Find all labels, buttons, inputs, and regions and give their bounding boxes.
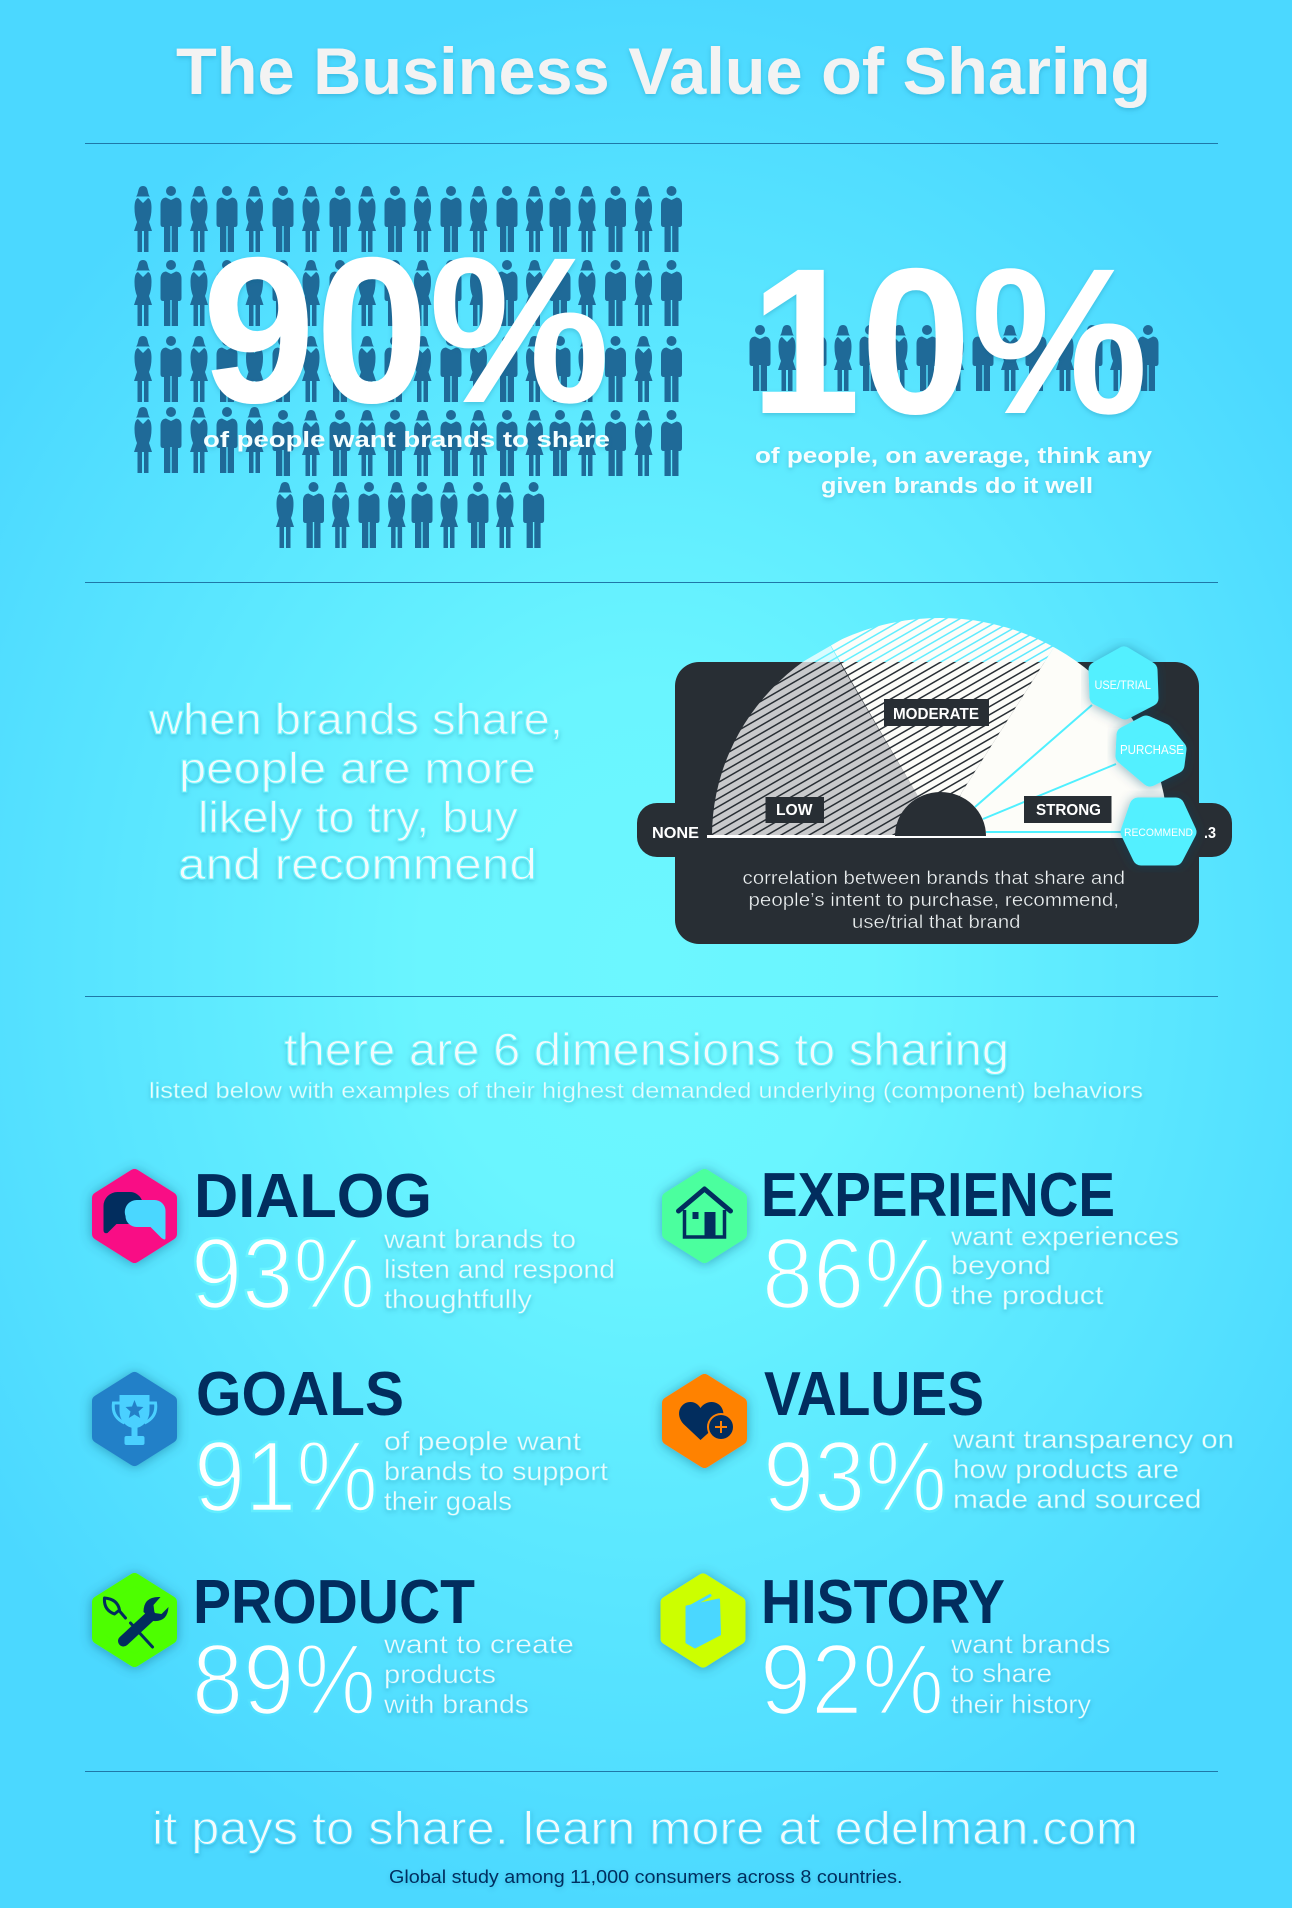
description: their history [951,1689,1091,1719]
heading: HISTORY [761,1568,1005,1637]
hexagon: use/trial: USE/TRIAL [1094,678,1151,692]
label: moderate: MODERATE [893,706,979,723]
caption: 10%: given brands do it well [821,473,1093,498]
sector: moderate [831,618,1054,798]
label: low [766,797,824,823]
heading: DIALOG [194,1162,432,1231]
section subheading: listed below with examples of their highest demanded underlying (component) behaviors [149,1078,1143,1103]
label: moderate [884,699,989,726]
description: want brands to [383,1224,576,1254]
description [950,1629,1110,1719]
big number: 90%: 90% [202,215,610,447]
footer source note: Global study among 11,000 consumers across 8 countries. [389,1867,902,1887]
item: experience [668,1161,1179,1330]
description [383,1629,574,1719]
description: products [384,1659,496,1689]
title: The Business Value of Sharing [176,34,1151,108]
description: want transparency on [952,1424,1234,1454]
description: want brands [950,1629,1110,1659]
axis baseline [707,835,1127,838]
hexagon: use/trial [1094,655,1151,711]
statement: when brands share: when brands share, [148,695,563,744]
statement: when brands share: and recommend [178,840,537,889]
item: goals [98,1360,609,1533]
hexagon: recommend: RECOMMEND [1124,827,1193,839]
chart caption: people’s intent to purchase, recommend, [748,889,1119,910]
description [384,1426,609,1516]
description: how products are [953,1454,1179,1484]
chart caption [742,867,1125,932]
hexagon: purchase: PURCHASE [1120,742,1184,757]
description: made and sourced [953,1484,1202,1514]
statement: when brands share: people are more [179,744,536,793]
chart caption: correlation between brands that share and [742,867,1125,888]
statement: when brands share [148,695,563,889]
heading: EXPERIENCE [761,1161,1115,1230]
icon: book [666,1580,740,1662]
description: want to create [383,1629,574,1659]
percentage: 93% [191,1218,375,1330]
icon: trophy [98,1378,171,1460]
label: low: LOW [776,802,813,819]
pictogram: 90 percent people [134,186,682,548]
description: want experiences [950,1221,1179,1251]
percentage: 89% [192,1624,376,1736]
footer call to action: it pays to share. learn more at edelman.com [152,1802,1138,1854]
connector lines [975,705,1124,832]
hexagon: recommend [1124,806,1193,857]
icon: wrench and brush [98,1579,171,1661]
statement: when brands share: likely to try, buy [198,793,518,842]
icon: heart with plus [668,1380,741,1462]
hexagon: purchase [1120,724,1184,778]
item: dialog [98,1162,615,1330]
label: none: NONE [652,825,699,842]
description [950,1221,1179,1310]
description: beyond [951,1250,1051,1280]
description [383,1224,615,1314]
sector: strong [960,647,1164,835]
description [952,1424,1234,1514]
big number: 10%: 10% [750,226,1148,458]
icon: speech bubbles [98,1175,171,1257]
heading: PRODUCT [193,1568,475,1637]
percentage: 92% [760,1624,944,1736]
description: thoughtfully [384,1284,532,1314]
label: .3: .3 [1204,825,1216,842]
item: values [668,1360,1234,1533]
label: strong [1024,796,1112,823]
description: brands to support [384,1456,609,1486]
description: the product [951,1280,1104,1310]
label: strong: STRONG [1036,802,1101,819]
panel: correlation chart [637,614,1232,944]
caption: 90%: of people want brands to share [203,427,610,452]
item: history [666,1568,1110,1736]
percentage: 86% [762,1218,946,1330]
description: of people want [384,1426,582,1456]
sector: low [712,646,918,835]
item: product [98,1568,574,1736]
dark panel background [637,662,1232,944]
divider lines [85,143,1218,1772]
icon: house [668,1175,741,1257]
heading: VALUES [764,1360,984,1429]
percentage: 91% [194,1421,378,1533]
heading: GOALS [196,1360,404,1429]
semicircle sectors [700,614,1180,836]
description: listen and respond [384,1254,615,1284]
section heading: dimensions: there are 6 dimensions to sharing [284,1024,1009,1075]
description: with brands [383,1689,529,1719]
pictogram: 10 percent people [750,325,1158,391]
percentage: 93% [763,1421,947,1533]
description: their goals [384,1486,512,1516]
description: to share [951,1658,1052,1688]
inner semicircle [895,792,986,836]
caption: 10%: of people, on average, think any [755,443,1153,468]
caption: 10% [755,443,1153,498]
chart caption: use/trial that brand [852,911,1020,932]
